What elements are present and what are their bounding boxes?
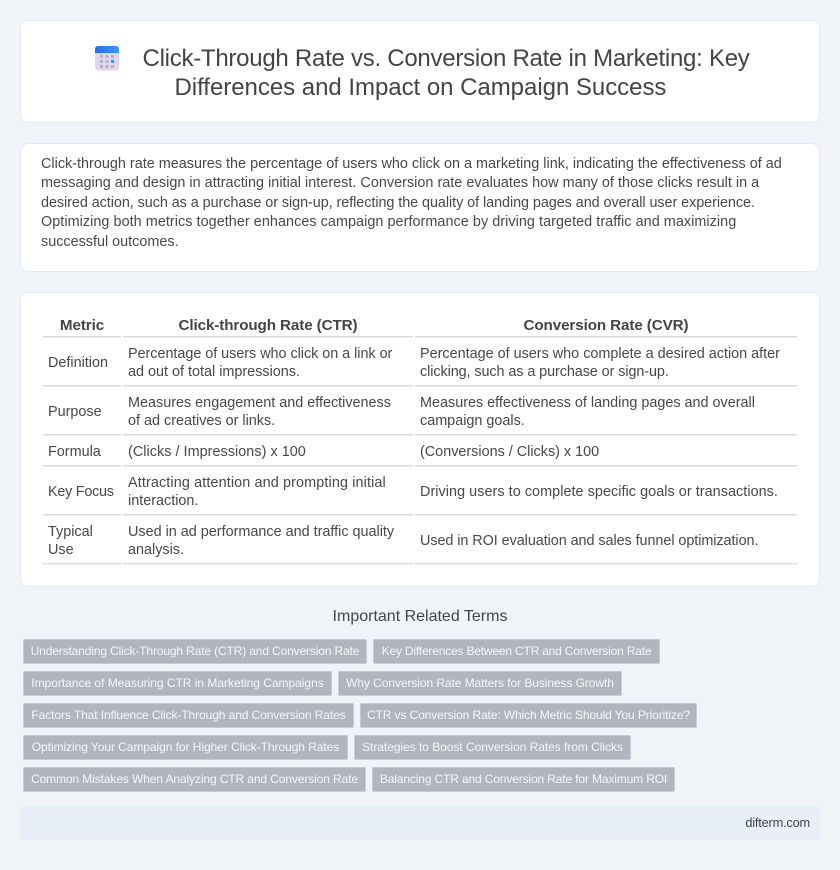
title: Click-Through Rate vs. Conversion Rate in Marketing: Key	[142, 45, 750, 72]
table header: Click-through Rate (CTR)	[178, 317, 358, 334]
row: formula: (Conversions / Clicks) x 100	[420, 444, 599, 460]
row: definition: ad out of total impressions.	[128, 364, 300, 380]
text block: summary: Click-through rate measures the percentage of users who click on a marketing link, indicating the effectiveness of ad	[41, 156, 782, 172]
text block: summary: desired action, such as a purchase or sign-up, reflecting the quality of landing pages and overall user experience.	[41, 195, 755, 211]
row: purpose	[48, 395, 755, 429]
heading: important related terms: Important Related Terms	[333, 608, 507, 625]
row: typical use	[48, 524, 758, 558]
panel: comparison table	[20, 292, 820, 587]
tag list: Optimizing Your Campaign for Higher Click-Through Rates	[32, 740, 339, 754]
table header: Conversion Rate (CVR)	[524, 317, 688, 334]
row: typical use: analysis.	[128, 542, 184, 558]
row: definition	[48, 346, 780, 380]
tag list: Understanding Click-Through Rate (CTR) and Conversion Rate	[31, 644, 359, 658]
text block: summary: successful outcomes.	[41, 234, 179, 250]
text block: summary: Optimizing both metrics together enhances campaign performance by driving targeted traffic and maximizing	[41, 214, 736, 230]
tag list: Importance of Measuring CTR in Marketing Campaigns	[31, 676, 324, 690]
tag list: Why Conversion Rate Matters for Business Growth	[346, 676, 614, 690]
row: key focus: Key Focus	[48, 484, 114, 500]
row: definition: Percentage of users who click on a link or	[128, 346, 392, 362]
text block: summary: messaging and design in attracting initial interest. Conversion rate evaluates how many of those clicks result in a	[41, 175, 759, 191]
row: typical use: Used in ad performance and traffic quality	[128, 524, 394, 540]
row: key focus: Attracting attention and prompting initial	[128, 475, 386, 491]
row: definition: Definition	[48, 355, 108, 371]
table header	[60, 317, 688, 334]
footer bar	[20, 806, 820, 840]
tag list: CTR vs Conversion Rate: Which Metric Should You Prioritize?	[367, 708, 690, 722]
text block: summary	[41, 156, 782, 250]
row: purpose: Measures engagement and effectiveness	[128, 395, 391, 411]
row: formula	[48, 444, 599, 460]
row: formula: Formula	[48, 444, 101, 460]
row: definition: Percentage of users who complete a desired action after	[420, 346, 780, 362]
icon: calendar	[95, 46, 119, 70]
row: key focus: Driving users to complete specific goals or transactions.	[420, 484, 778, 500]
row: purpose: of ad creatives or links.	[128, 413, 275, 429]
tag list: Factors That Influence Click-Through and Conversion Rates	[31, 708, 346, 722]
row: purpose: campaign goals.	[420, 413, 525, 429]
tag list: Common Mistakes When Analyzing CTR and Conversion Rate	[31, 772, 358, 786]
panel: title card	[20, 20, 820, 123]
row: key focus: interaction.	[128, 493, 198, 509]
tag list: Balancing CTR and Conversion Rate for Maximum ROI	[380, 772, 667, 786]
row: key focus	[48, 475, 778, 509]
row: typical use: Use	[48, 542, 74, 558]
row: typical use: Used in ROI evaluation and sales funnel optimization.	[420, 533, 758, 549]
table header: Metric	[60, 317, 104, 334]
tag list: Strategies to Boost Conversion Rates from Clicks	[362, 740, 623, 754]
tag list	[23, 639, 697, 792]
row: purpose: Purpose	[48, 404, 102, 420]
footer text: difterm.com	[745, 815, 810, 830]
row: typical use: Typical	[48, 524, 93, 540]
row: formula: (Clicks / Impressions) x 100	[128, 444, 306, 460]
row: definition: clicking, such as a purchase or sign-up.	[420, 364, 669, 380]
title	[142, 45, 750, 101]
title: Differences and Impact on Campaign Success	[174, 74, 666, 101]
panel: summary paragraph	[20, 143, 820, 272]
row: purpose: Measures effectiveness of landing pages and overall	[420, 395, 755, 411]
tag list: Key Differences Between CTR and Conversion Rate	[382, 644, 651, 658]
